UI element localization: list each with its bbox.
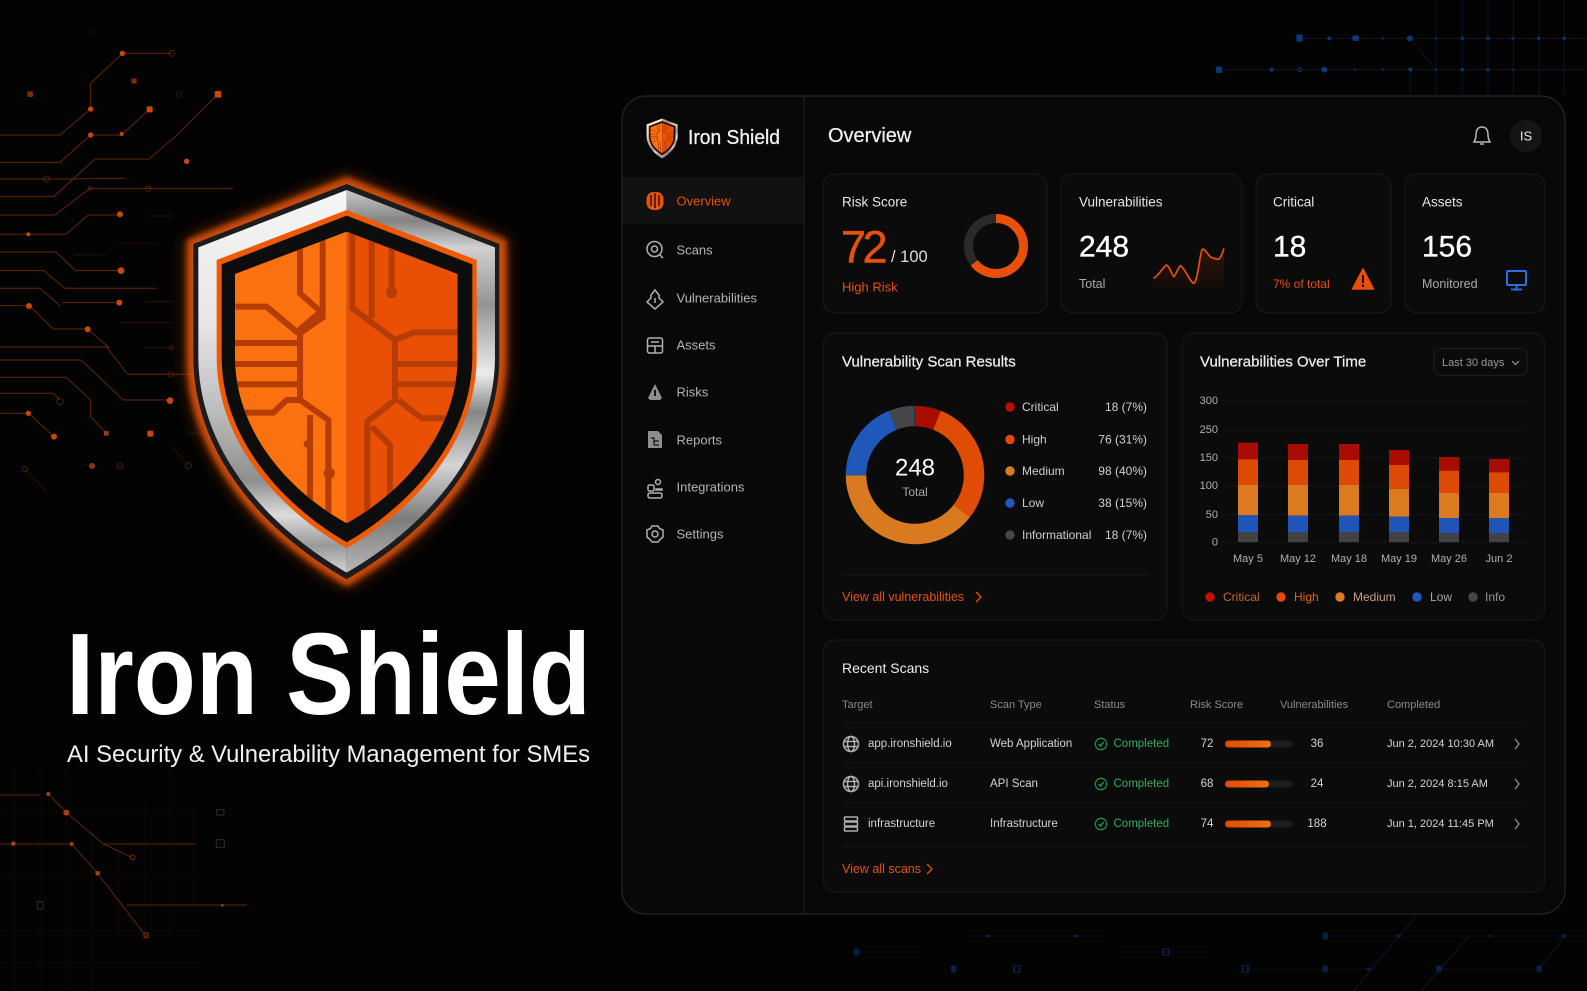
avatar bbox=[1510, 120, 1542, 152]
nav item: overview active bbox=[623, 177, 803, 224]
decorative blue circuit, top right bbox=[1216, 0, 1587, 95]
card: vulnerabilities: Total bbox=[1079, 277, 1105, 291]
chart legend: Medium bbox=[1353, 590, 1396, 604]
table row: api: api.ironshield.io bbox=[868, 778, 948, 790]
card: vulnerabilities: Vulnerabilities bbox=[1079, 194, 1163, 210]
dropdown: Last 30 days bbox=[1442, 357, 1505, 369]
subtitle: AI Security & Vulnerability Management for SMEs bbox=[67, 741, 590, 768]
dropdown bbox=[1434, 348, 1527, 376]
table header: Completed bbox=[1387, 699, 1440, 711]
table row: app bbox=[844, 736, 1519, 752]
nav item: assets bbox=[648, 338, 716, 353]
panel: dashboard bbox=[622, 96, 1565, 914]
legend: 18 (7%) bbox=[1105, 400, 1147, 414]
link: view all vulnerabilities: View all vulnerabilities bbox=[842, 590, 964, 604]
nav item: risks bbox=[648, 384, 709, 400]
nav item: risks: Risks bbox=[676, 384, 709, 400]
table row: infrastructure: infrastructure bbox=[868, 818, 935, 830]
card: critical bbox=[1256, 174, 1391, 313]
card: risk score bbox=[823, 174, 1047, 313]
nav item: scans bbox=[647, 242, 713, 258]
table row: api bbox=[844, 776, 1519, 792]
nav item: reports bbox=[648, 431, 723, 448]
stacked bar chart: 100 bbox=[1200, 480, 1218, 492]
stacked bar chart: 0 bbox=[1212, 536, 1218, 548]
card: assets: Assets bbox=[1422, 194, 1463, 210]
table row: app: 72 bbox=[1201, 738, 1213, 750]
panel: vulnerability scan results: Vulnerability Scan Results bbox=[842, 354, 1016, 370]
logo bbox=[646, 118, 780, 159]
legend bbox=[1005, 400, 1147, 542]
avatar: IS bbox=[1520, 128, 1532, 144]
table row: api: 24 bbox=[1311, 778, 1324, 790]
logo: Iron Shield bbox=[688, 127, 780, 149]
icon: warning bbox=[1352, 269, 1374, 289]
stacked bar chart: May 26 bbox=[1431, 553, 1467, 565]
nav item: reports: Reports bbox=[676, 432, 723, 448]
stacked bar chart: May 18 bbox=[1331, 553, 1367, 565]
table header: Vulnerabilities bbox=[1280, 699, 1349, 711]
chart legend: High bbox=[1294, 590, 1319, 604]
table row: infrastructure: Infrastructure bbox=[990, 818, 1058, 830]
chart legend bbox=[1205, 590, 1505, 604]
table header: Scan Type bbox=[990, 699, 1042, 711]
stacked bar chart: May 19 bbox=[1381, 553, 1417, 565]
card: assets bbox=[1405, 174, 1545, 313]
card: critical: 18 bbox=[1273, 230, 1306, 264]
nav item: scans: Scans bbox=[676, 242, 713, 258]
heading: overview: Overview bbox=[828, 125, 912, 147]
nav item: overview active: Overview bbox=[676, 194, 731, 208]
sparkline bbox=[1153, 248, 1224, 289]
table row: app: Completed bbox=[1114, 738, 1169, 750]
panel: vulnerabilities over time bbox=[1182, 333, 1545, 620]
table header: Target bbox=[842, 699, 873, 711]
table header bbox=[842, 699, 1440, 711]
table row: api: Completed bbox=[1114, 778, 1169, 790]
card: vulnerabilities: 248 bbox=[1079, 230, 1129, 264]
decorative circuit traces, bottom left bbox=[0, 770, 247, 991]
stacked bar chart: 250 bbox=[1200, 424, 1218, 436]
table row: api: 68 bbox=[1201, 778, 1213, 790]
nav item: settings: Settings bbox=[676, 526, 724, 542]
nav item: integrations bbox=[648, 480, 745, 498]
gauge ring bbox=[968, 218, 1024, 274]
card: vulnerabilities bbox=[1061, 174, 1242, 313]
stacked bar chart: May 5 bbox=[1233, 553, 1263, 565]
card: critical: 7% of total bbox=[1273, 277, 1330, 291]
panel: recent scans bbox=[823, 640, 1545, 892]
chart legend: Critical bbox=[1223, 590, 1260, 604]
legend: High bbox=[1022, 432, 1047, 446]
table header: Status bbox=[1094, 699, 1126, 711]
nav item: assets: Assets bbox=[676, 338, 716, 352]
nav item: integrations: Integrations bbox=[676, 480, 745, 494]
panel: vulnerabilities over time: Vulnerabilities Over Time bbox=[1200, 354, 1366, 370]
table row: app: app.ironshield.io bbox=[868, 738, 952, 750]
table row: infrastructure: Jun 1, 2024 11:45 PM bbox=[1387, 818, 1494, 830]
panel: vulnerability scan results: Total bbox=[902, 485, 928, 499]
legend: Medium bbox=[1022, 464, 1065, 478]
stacked bar chart bbox=[1200, 395, 1527, 565]
legend: Informational bbox=[1022, 528, 1091, 542]
card: risk score: / 100 bbox=[891, 248, 928, 266]
table row: app: Web Application bbox=[990, 738, 1072, 750]
panel: sidebar bbox=[623, 118, 803, 542]
card: risk score: High Risk bbox=[842, 280, 898, 294]
legend: Critical bbox=[1022, 400, 1059, 414]
table row: infrastructure: 188 bbox=[1307, 818, 1327, 830]
panel: vulnerability scan results bbox=[823, 333, 1167, 620]
card: risk score: 72 bbox=[841, 222, 886, 272]
stacked bar chart: May 12 bbox=[1280, 553, 1316, 565]
card: critical: Critical bbox=[1273, 194, 1314, 210]
main shield emblem bbox=[187, 177, 507, 587]
decorative blue circuit, bottom right bbox=[854, 917, 1587, 991]
icon: monitor bbox=[1507, 271, 1526, 290]
table row: api: Jun 2, 2024 8:15 AM bbox=[1387, 778, 1488, 790]
legend: 38 (15%) bbox=[1098, 496, 1147, 510]
legend: Low bbox=[1022, 496, 1044, 510]
table row: app: Jun 2, 2024 10:30 AM bbox=[1387, 738, 1494, 750]
nav item: vulnerabilities: Vulnerabilities bbox=[676, 290, 757, 306]
chart legend: Info bbox=[1485, 590, 1505, 604]
table row: infrastructure bbox=[844, 817, 1519, 831]
donut chart bbox=[856, 416, 974, 534]
table row: app: 36 bbox=[1311, 738, 1323, 750]
nav item: settings bbox=[647, 526, 724, 542]
legend: 98 (40%) bbox=[1098, 464, 1147, 478]
link: view all scans: View all scans bbox=[842, 862, 921, 876]
card: risk score: Risk Score bbox=[842, 194, 907, 210]
decorative circuit traces, left bbox=[0, 30, 233, 492]
table header: Risk Score bbox=[1190, 699, 1243, 711]
panel: vulnerability scan results: 248 bbox=[895, 454, 935, 482]
stacked bar chart: 300 bbox=[1200, 395, 1218, 407]
table row: infrastructure: 74 bbox=[1201, 818, 1214, 830]
chart legend: Low bbox=[1430, 590, 1452, 604]
table row: api: API Scan bbox=[990, 778, 1038, 790]
card: assets: Monitored bbox=[1422, 277, 1478, 291]
nav item: vulnerabilities bbox=[647, 290, 757, 309]
title: Iron Shield bbox=[66, 609, 591, 739]
icon: bell bbox=[1474, 127, 1490, 144]
stacked bar chart: 50 bbox=[1206, 509, 1218, 521]
table row: infrastructure: Completed bbox=[1114, 818, 1169, 830]
card: assets: 156 bbox=[1422, 230, 1472, 264]
stacked bar chart: 150 bbox=[1200, 452, 1218, 464]
stacked bar chart: Jun 2 bbox=[1486, 553, 1512, 565]
legend: 18 (7%) bbox=[1105, 528, 1147, 542]
panel: recent scans: Recent Scans bbox=[842, 660, 929, 676]
legend: 76 (31%) bbox=[1098, 432, 1147, 446]
